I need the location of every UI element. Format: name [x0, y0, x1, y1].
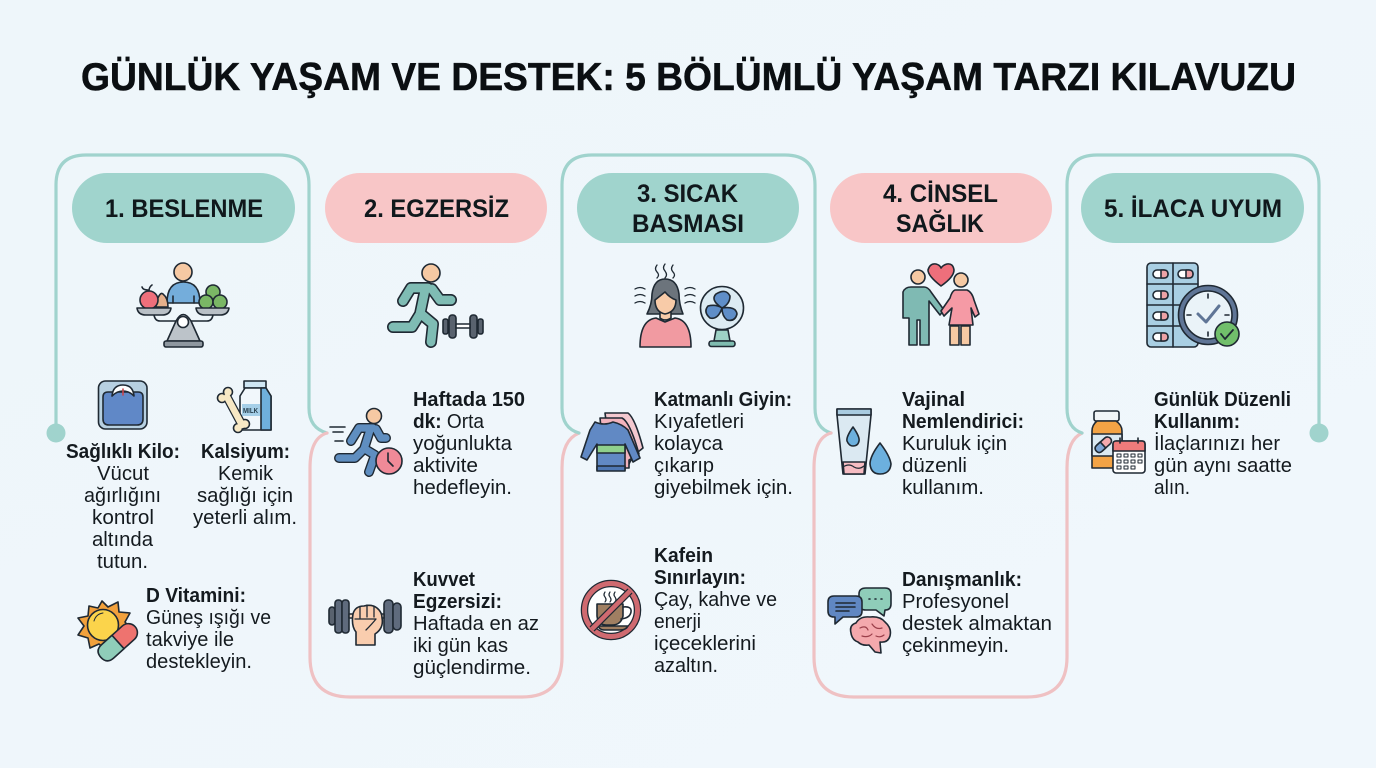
item: Günlük Düzenli Kullanım: Günlük Düzenli: [1154, 389, 1291, 411]
item: Danışmanlık: destek almaktan: [902, 613, 1052, 635]
item: Katmanlı Giyin: Katmanlı Giyin:: [654, 389, 792, 411]
heading pill: 3. Sıcak Basması: BASMASI: [632, 210, 744, 238]
item: Haftada 150 dk: aktivite: [413, 455, 478, 477]
item: Kuvvet Egzersizi: Haftada en az: [413, 613, 539, 635]
item: Vajinal Nemlendirici: Kuruluk için: [902, 433, 1007, 455]
item: Kuvvet Egzersizi: iki gün kas: [413, 635, 508, 657]
item: Sağlıklı Kilo: kontrol: [92, 507, 154, 529]
item: Sağlıklı Kilo: Sağlıklı Kilo:: [66, 441, 180, 463]
item: D Vitamini: destekleyin.: [146, 651, 252, 673]
item: Kuvvet Egzersizi: güçlendirme.: [413, 657, 531, 679]
item: D Vitamini: Güneş ışığı ve: [146, 607, 271, 629]
panel: 4. Cinsel Sağlık: [828, 173, 1052, 657]
icon: runner with dumbbell: [393, 264, 483, 342]
heading pill: 2. Egzersiz: 2. EGZERSİZ: [364, 195, 509, 223]
item: Günlük Düzenli Kullanım: Kullanım:: [1154, 411, 1240, 433]
icon: woman with hot flash and fan: [635, 264, 744, 347]
icon: layered sweaters: [581, 413, 643, 471]
item: Günlük Düzenli Kullanım: alın.: [1154, 477, 1190, 499]
item: Kafein Sınırlayın: [584, 545, 777, 677]
heading pill: 3. Sıcak Basması: [577, 173, 799, 243]
icon: couple holding hands with heart: [903, 264, 979, 345]
item: Katmanlı Giyin: Kıyafetleri: [654, 411, 744, 433]
item: Kafein Sınırlayın: içeceklerini: [654, 633, 756, 655]
item: D Vitamini: [78, 585, 271, 673]
heading pill: 4. Cinsel Sağlık: [830, 173, 1052, 243]
heading pill: 5. İlaca Uyum: 5. İLACA UYUM: [1104, 195, 1282, 223]
item: Haftada 150 dk: hedefleyin.: [413, 477, 512, 499]
item: Kafein Sınırlayın: azaltın.: [654, 655, 718, 677]
item: Haftada 150 dk: dk: Orta: [413, 411, 485, 433]
title: GÜNLÜK YAŞAM VE DESTEK: 5 BÖLÜMLÜ YAŞAM TARZI KILAVUZU: [81, 56, 1296, 99]
item: Sağlıklı Kilo: tutun.: [97, 551, 148, 573]
item: Sağlıklı Kilo: [66, 381, 180, 573]
item: D Vitamini: D Vitamini:: [146, 585, 246, 607]
item: Kalsiyum: Kemik: [218, 463, 274, 485]
heading pill: 2. Egzersiz: [325, 173, 547, 243]
item: Haftada 150 dk: [330, 389, 525, 499]
icon: pill bottle and calendar: [1092, 411, 1145, 473]
item: Sağlıklı Kilo: ağırlığını: [84, 485, 161, 507]
heading pill: 4. Cinsel Sağlık: 4. CİNSEL: [883, 180, 998, 208]
item: Kafein Sınırlayın: Çay, kahve ve: [654, 589, 777, 611]
item: Vajinal Nemlendirici: Nemlendirici:: [902, 411, 1024, 433]
item: Kafein Sınırlayın: enerji: [654, 611, 701, 633]
item: Günlük Düzenli Kullanım: İlaçlarınızı her: [1154, 432, 1280, 455]
item: Kalsiyum: sağlığı için: [197, 485, 293, 507]
item: Kafein Sınırlayın: Sınırlayın:: [654, 567, 746, 589]
item: Vajinal Nemlendirici: düzenli: [902, 455, 967, 477]
icon: blister pack and clock: [1147, 263, 1239, 347]
icon: bathroom scale: [98, 381, 147, 429]
icon: speech bubbles and brain: [828, 588, 891, 653]
item: Haftada 150 dk: Haftada 150: [413, 389, 525, 411]
heading pill: 1. Beslenme: [72, 173, 295, 243]
item: Sağlıklı Kilo: altında: [92, 529, 154, 551]
item: Haftada 150 dk: yoğunlukta: [413, 433, 513, 455]
item: Kafein Sınırlayın: Kafein: [654, 545, 713, 567]
item: Danışmanlık: çekinmeyin.: [902, 635, 1009, 657]
icon: no coffee sign: [584, 584, 638, 636]
item: Katmanlı Giyin: giyebilmek için.: [654, 477, 793, 499]
item: Kuvvet Egzersizi: [329, 569, 539, 679]
item: Vajinal Nemlendirici: [837, 389, 1024, 499]
icon: bone and milk carton: [218, 381, 271, 432]
item: Günlük Düzenli Kullanım: [1092, 389, 1292, 499]
icon: sun and capsule: [78, 601, 141, 664]
connector line linking the five sections: [46, 155, 1328, 697]
item: Kuvvet Egzersizi: Kuvvet: [413, 569, 475, 591]
icon: fist holding dumbbell: [329, 600, 401, 645]
item: Kalsiyum: [193, 381, 297, 529]
heading pill: 5. İlaca Uyum: [1081, 173, 1304, 243]
item: Katmanlı Giyin: [581, 389, 793, 499]
item: Katmanlı Giyin: çıkarıp: [654, 455, 714, 477]
heading pill: 1. Beslenme: 1. BESLENME: [105, 195, 263, 223]
panel: 3. Sıcak Basması: [577, 173, 799, 677]
heading pill: 4. Cinsel Sağlık: SAĞLIK: [896, 209, 984, 238]
item: Günlük Düzenli Kullanım: gün aynı saatte: [1154, 455, 1292, 477]
panel: 5. İlaca Uyum: [1081, 173, 1304, 499]
item: Kalsiyum: Kalsiyum:: [201, 441, 290, 463]
item: Kalsiyum: yeterli alım.: [193, 507, 297, 529]
item: Katmanlı Giyin: kolayca: [654, 433, 724, 455]
item: Vajinal Nemlendirici: Vajinal: [902, 389, 965, 411]
item: Danışmanlık: [828, 569, 1052, 657]
heading pill: 3. Sıcak Basması: 3. SICAK: [637, 180, 738, 208]
panel: 1. Beslenme: [66, 173, 297, 673]
icon: person on balance scale with food: [137, 263, 229, 347]
item: Sağlıklı Kilo: Vücut: [97, 463, 149, 485]
icon: moisturizer tube and drop: [837, 409, 891, 474]
item: Danışmanlık: Profesyonel: [902, 591, 1009, 613]
panel: 2. Egzersiz: [325, 173, 547, 679]
item: D Vitamini: takviye ile: [146, 629, 234, 651]
icon: runner with clock: [330, 408, 402, 474]
item: Danışmanlık: Danışmanlık:: [902, 569, 1022, 591]
item: Vajinal Nemlendirici: kullanım.: [902, 477, 984, 499]
icon: bone and milk carton: MILK: [243, 408, 258, 415]
item: Kuvvet Egzersizi: Egzersizi:: [413, 591, 502, 613]
